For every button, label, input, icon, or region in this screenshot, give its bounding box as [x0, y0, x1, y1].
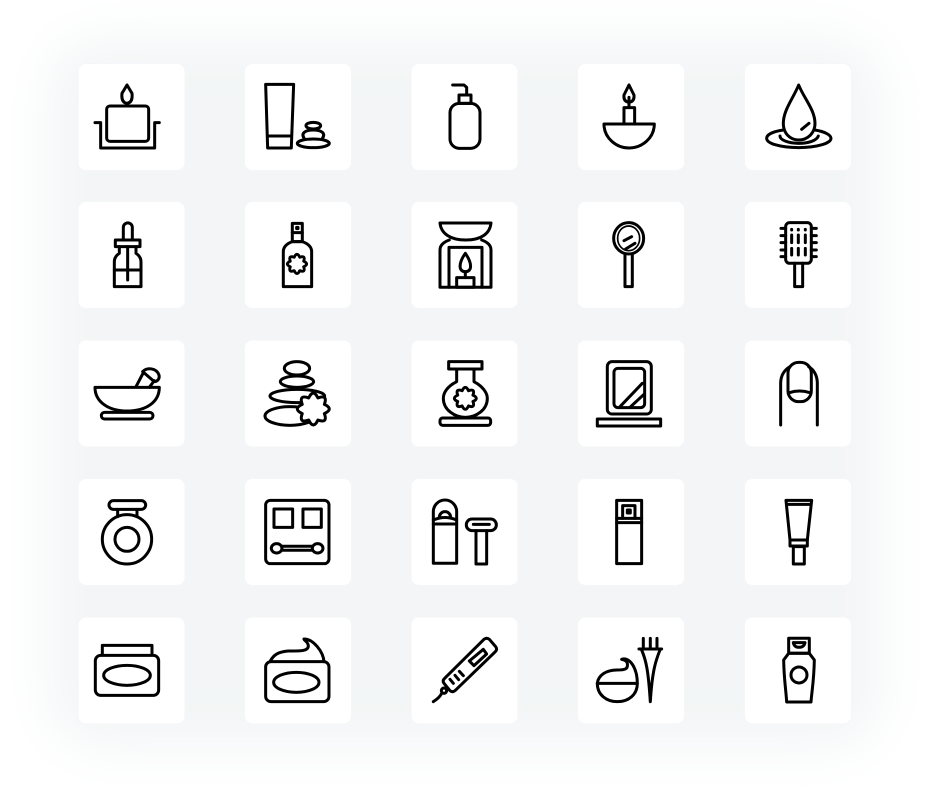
icon: cream jar [95, 645, 159, 695]
icon: dropper bottle [114, 223, 141, 287]
card: lotion bottle [744, 617, 852, 724]
card: table mirror [578, 340, 684, 447]
card: water drop [744, 64, 852, 170]
card: stacked stones with flower [244, 340, 352, 447]
card: open cream jar [244, 617, 352, 724]
card: shaving foam and razor [411, 478, 518, 586]
icon: hand mirror [614, 223, 644, 287]
icon: oil lamp [604, 85, 654, 148]
icon: pump bottle [450, 85, 480, 148]
card: oil burner [411, 202, 518, 308]
card: makeup palette [244, 478, 352, 586]
card: tall cosmetic bottle [578, 478, 684, 586]
card: fingernail [744, 340, 852, 447]
icon: hair brush [781, 223, 816, 287]
card: aroma flask with flower [411, 340, 518, 447]
icon: shaving foam and razor [433, 500, 496, 564]
card: hand mirror [578, 202, 684, 308]
card: hair straightener pen [411, 617, 518, 724]
icon: tube and stones [266, 84, 329, 148]
card: cream jar [78, 617, 185, 724]
icon: hair straightener pen [433, 638, 497, 702]
card: dropper bottle [78, 202, 185, 308]
icon: makeup palette [266, 500, 329, 564]
icon: round perfume bottle [102, 501, 152, 564]
card: pump bottle [411, 64, 518, 170]
icon: lotion bottle [784, 638, 814, 702]
icon: stacked stones with flower [265, 362, 329, 425]
icon: candle in holder [95, 85, 159, 148]
icon: aroma flask with flower [440, 362, 491, 425]
card: candle in holder [78, 64, 185, 170]
icon: table mirror [597, 362, 661, 426]
icon: fingernail [781, 362, 817, 425]
card: hair dye bowl and brush [578, 617, 684, 724]
card: oil lamp [578, 64, 684, 170]
card: spray bottle [244, 202, 352, 308]
card: tube and stones [244, 64, 352, 170]
icon: mortar and pestle [95, 369, 159, 419]
icon: water drop [767, 85, 831, 148]
icon: small tube [786, 500, 812, 564]
icon: oil burner [440, 223, 491, 287]
icon: hair dye bowl and brush [597, 638, 662, 702]
card: mortar and pestle [78, 340, 185, 447]
card: round perfume bottle [78, 478, 185, 586]
icon: open cream jar [266, 639, 329, 702]
icon: spray bottle [283, 223, 312, 287]
card: small tube [744, 478, 852, 586]
icon: tall cosmetic bottle [617, 500, 642, 564]
card: hair brush [744, 202, 852, 308]
